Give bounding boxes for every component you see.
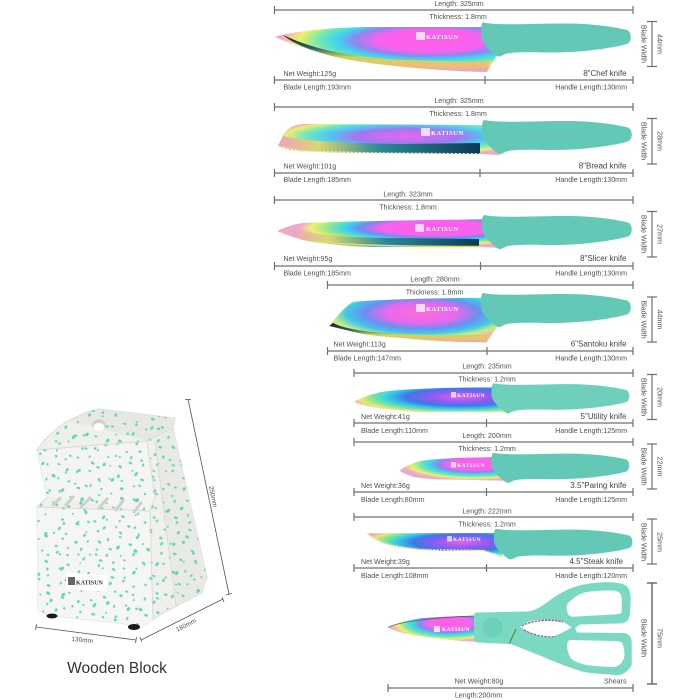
blade width dimension — [640, 297, 664, 342]
depth dimension — [140, 597, 224, 642]
blade width dimension: 75mm — [656, 628, 664, 648]
thickness label: Thickness: 1.2mm — [458, 520, 516, 528]
length dimension: Length: 200mm — [462, 432, 512, 440]
panel: paring knife — [354, 432, 664, 504]
blade width dimension: Blade Width — [640, 25, 648, 63]
thickness label: Thickness: 1.8mm — [406, 288, 463, 296]
length dimension — [354, 508, 633, 521]
weight and name labels: 4.5"Steak knife — [569, 557, 624, 566]
blade width dimension: Blade Width — [640, 122, 648, 160]
shears illustration: KATISUN — [442, 627, 470, 633]
blade and handle length dimension: Handle Length:130mm — [555, 176, 627, 184]
weight and name labels: 8"Chef knife — [583, 69, 627, 78]
weight and name labels: Net Weight:113g — [334, 340, 386, 348]
blade width dimension: 20mm — [656, 387, 664, 407]
panel: slicer knife — [274, 190, 664, 278]
length dimension: Length: 222mm — [462, 508, 512, 516]
blade and handle length dimension: Blade Length:110mm — [361, 427, 428, 435]
blade and handle length dimension: Handle Length:120mm — [555, 572, 627, 580]
chef knife illustration — [275, 22, 631, 72]
brand plaque: KATISUN — [76, 580, 104, 586]
weight and name labels: Net Weight:39g — [361, 558, 410, 566]
shears illustration — [388, 582, 632, 675]
thickness label: Thickness: 1.8mm — [429, 13, 487, 21]
chef knife illustration: KATISUN — [426, 34, 459, 41]
slicer knife illustration — [277, 215, 632, 249]
weight and name labels: Net Weight:36g — [361, 482, 410, 490]
blade and handle length dimension — [274, 262, 633, 278]
blade width dimension: 22mm — [656, 457, 664, 476]
length dimension — [274, 97, 633, 111]
blade width dimension — [640, 118, 664, 164]
weight and name labels — [361, 412, 627, 421]
height dimension: 250mm — [207, 485, 218, 508]
santoku knife illustration: KATISUN — [426, 306, 459, 313]
utility knife illustration — [354, 383, 629, 413]
bread knife illustration — [278, 120, 632, 155]
length dimension and labels: Net Weight:80g — [455, 678, 503, 686]
bread knife illustration: KATISUN — [431, 130, 464, 137]
blade and handle length dimension: Handle Length:125mm — [555, 496, 627, 504]
length dimension: Length: 325mm — [434, 97, 484, 105]
blade width dimension — [640, 22, 664, 66]
thickness label: Thickness: 1.2mm — [458, 376, 516, 384]
weight and name labels — [334, 340, 627, 348]
weight and name labels: Net Weight:101g — [284, 162, 336, 170]
blade and handle length dimension: Blade Length:185mm — [284, 176, 351, 184]
blade width dimension: 25mm — [656, 532, 664, 552]
weight and name labels: Net Weight:41g — [361, 413, 410, 421]
weight and name labels: Net Weight:125g — [284, 70, 336, 78]
steak knife illustration — [367, 529, 632, 559]
block illustration — [37, 409, 207, 630]
steak knife illustration: KATISUN — [453, 537, 481, 543]
weight and name labels: 3.5"Paring knife — [570, 481, 627, 490]
blade width dimension: 28mm — [656, 131, 664, 151]
thickness label: Thickness: 1.8mm — [379, 204, 437, 212]
blade width dimension — [640, 374, 664, 420]
blade and handle length dimension: Handle Length:125mm — [555, 427, 627, 435]
length dimension — [354, 362, 633, 377]
blade and handle length dimension: Blade Length:193mm — [284, 84, 351, 92]
weight and name labels — [284, 162, 627, 170]
length dimension and labels — [388, 678, 633, 700]
length dimension: Length: 323mm — [383, 190, 433, 198]
blade and handle length dimension — [354, 488, 633, 504]
blade and handle length dimension — [274, 76, 633, 92]
length dimension: Length: 235mm — [462, 362, 512, 370]
blade width dimension: Blade Width — [640, 215, 648, 253]
blade and handle length dimension: Blade Length:185mm — [284, 270, 351, 278]
blade width dimension: 44mm — [656, 310, 664, 329]
blade width dimension: Blade Width — [640, 300, 648, 339]
panel: santoku knife — [328, 276, 664, 362]
length dimension and labels: Length:200mm — [455, 692, 502, 700]
knife slots — [53, 497, 141, 512]
utility knife illustration: KATISUN — [457, 393, 485, 399]
weight and name labels: 8"Slicer knife — [580, 254, 627, 263]
length dimension and labels: Shears — [604, 678, 627, 686]
weight and name labels: 6"Santoku knife — [571, 340, 627, 348]
weight and name labels — [361, 481, 627, 490]
blade and handle length dimension — [328, 347, 633, 362]
length dimension: Length: 280mm — [410, 276, 460, 284]
length dimension — [274, 0, 633, 14]
length dimension: Length: 325mm — [434, 0, 484, 8]
blade width dimension: 44mm — [656, 34, 664, 54]
panel: steak knife — [354, 508, 664, 580]
weight and name labels: Net Weight:95g — [284, 255, 332, 263]
panel: wooden block — [36, 399, 232, 677]
blade and handle length dimension — [274, 169, 633, 184]
slicer knife illustration: KATISUN — [426, 226, 459, 233]
blade width dimension — [640, 212, 664, 257]
blade width dimension — [640, 519, 664, 564]
paring knife illustration: KATISUN — [457, 463, 485, 469]
depth dimension: 180mm — [175, 618, 198, 634]
blade and handle length dimension: Handle Length:130mm — [555, 84, 627, 92]
weight and name labels — [361, 557, 624, 566]
length dimension — [328, 276, 633, 289]
blade width dimension: Blade Width — [640, 619, 648, 657]
brand plaque — [65, 573, 108, 591]
panel: shears — [388, 582, 664, 700]
thickness label: Thickness: 1.2mm — [458, 445, 516, 453]
panel: utility knife — [354, 362, 664, 435]
width dimension — [36, 624, 136, 645]
caption: Wooden Block — [67, 660, 167, 677]
blade width dimension: Blade Width — [640, 523, 648, 561]
paring knife illustration — [399, 453, 629, 483]
blade and handle length dimension: Blade Length:80mm — [361, 496, 425, 504]
height dimension — [185, 399, 232, 595]
santoku knife illustration — [329, 293, 631, 342]
blade and handle length dimension: Handle Length:130mm — [555, 354, 627, 362]
scissor hole — [92, 419, 106, 431]
blade width dimension: 27mm — [656, 224, 664, 244]
blade width dimension — [640, 583, 664, 684]
blade and handle length dimension — [354, 419, 633, 435]
feet — [46, 614, 140, 630]
blade width dimension — [640, 444, 664, 489]
panel: bread knife — [274, 97, 664, 184]
panel: chef knife — [274, 0, 664, 92]
blade width dimension: Blade Width — [640, 447, 648, 486]
width dimension: 130mm — [71, 636, 93, 645]
blade width dimension: Blade Width — [640, 378, 648, 416]
weight and name labels — [284, 69, 627, 78]
blade and handle length dimension: Blade Length:147mm — [334, 354, 401, 362]
length dimension — [354, 432, 633, 446]
blade and handle length dimension: Blade Length:108mm — [361, 572, 429, 580]
weight and name labels — [284, 254, 627, 263]
blade and handle length dimension — [354, 564, 633, 580]
length dimension — [274, 190, 633, 204]
blade and handle length dimension: Handle Length:130mm — [555, 270, 627, 278]
weight and name labels: 8"Bread knife — [579, 162, 627, 170]
weight and name labels: 5"Utility knife — [581, 412, 627, 421]
thickness label: Thickness: 1.8mm — [429, 110, 487, 118]
